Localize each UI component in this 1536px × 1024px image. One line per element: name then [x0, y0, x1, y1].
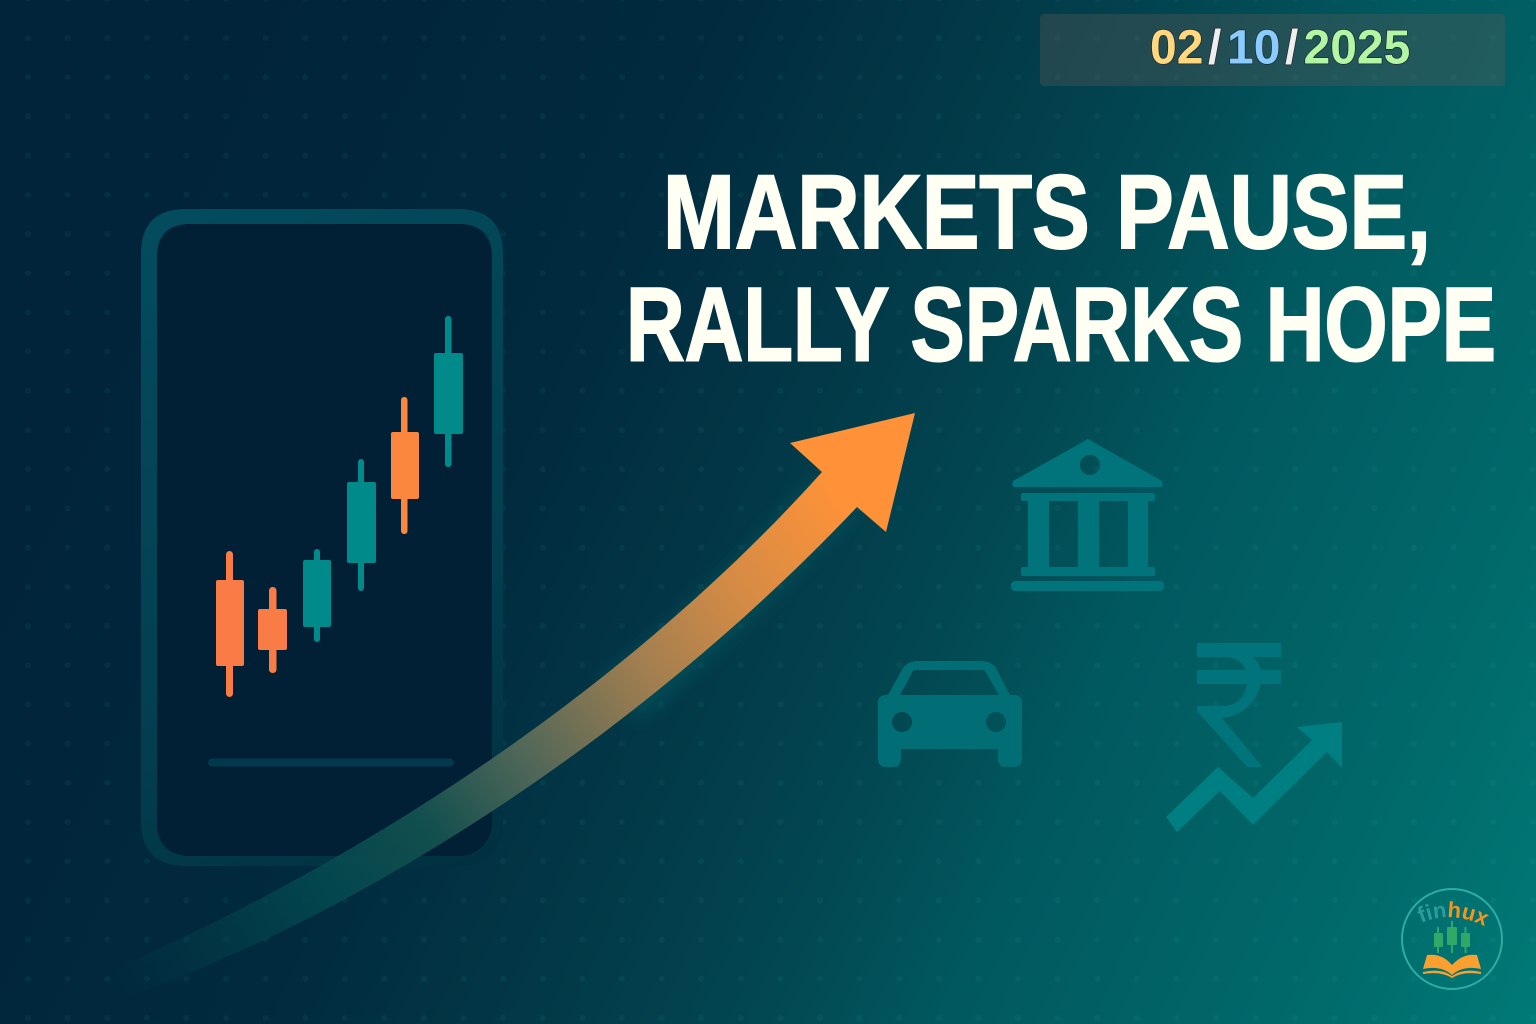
icon: bank — [1011, 439, 1164, 591]
finhux logo — [1401, 888, 1503, 990]
logo open book — [1423, 955, 1481, 978]
zigzag growth arrow — [1166, 722, 1342, 832]
candle 3 — [303, 549, 331, 642]
candlestick chart — [216, 316, 463, 697]
date badge — [1040, 14, 1505, 86]
rupee symbol — [1197, 643, 1281, 767]
icon: car — [878, 661, 1022, 767]
icon: rupee with rising arrow — [1166, 643, 1342, 832]
candle 4 — [347, 459, 376, 591]
phone frame — [141, 209, 503, 866]
candle 5 — [391, 397, 419, 534]
phone home bar — [208, 758, 454, 766]
logo ring — [1402, 889, 1502, 989]
date text: / — [1208, 22, 1221, 74]
candle 1 — [216, 551, 244, 697]
date text: / — [1285, 22, 1298, 74]
phone with candlestick chart — [141, 209, 503, 866]
date badge panel — [1040, 14, 1505, 86]
title — [626, 154, 1496, 384]
logo wordmark: finhux — [1418, 901, 1489, 926]
candle 2 — [258, 587, 287, 673]
date text: 10 — [1227, 22, 1280, 74]
phone screen — [157, 224, 492, 856]
date text: 2025 — [1304, 22, 1410, 74]
rising orange arrow — [100, 413, 915, 1000]
logo candles — [1434, 921, 1470, 953]
date text: 02 — [1150, 22, 1203, 74]
candle 6 — [434, 316, 463, 467]
